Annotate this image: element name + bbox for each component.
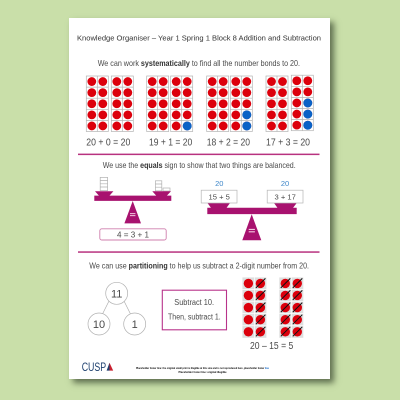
value label: 20 xyxy=(215,179,223,188)
ten frames: 18 + 2 xyxy=(207,76,252,132)
title: Knowledge Organiser – Year 1 Spring 1 Block 8 Addition and Subtraction xyxy=(77,34,321,42)
fulcrum with equals sign xyxy=(242,214,261,240)
ten frames: 17 + 3 xyxy=(266,75,313,132)
icon: cube stacks xyxy=(100,177,170,191)
value label: 20 xyxy=(281,179,289,188)
balance scale: 4 = 3 + 1 xyxy=(94,177,171,240)
equation box: 4 = 3 + 1 xyxy=(117,231,150,240)
part-whole model xyxy=(88,282,146,335)
ten frames: 19 + 1 xyxy=(147,76,193,132)
ten frame with crossed counters xyxy=(242,277,266,338)
footer text (illegible in reference; neutral placeholder): Placeholder footer line: original illegible xyxy=(178,371,227,374)
equation: 17 + 3 = 20: 17 + 3 = 20 xyxy=(266,138,310,149)
equation: 18 + 2 = 20: 18 + 2 = 20 xyxy=(207,138,250,149)
callout: subtract steps xyxy=(162,290,226,330)
ten frames: 20 + 0 xyxy=(86,76,133,132)
box: 15 + 5: 15 + 5 xyxy=(209,193,230,202)
panel: equals sign and balance xyxy=(94,160,303,240)
heading: partitioning: We can use partitioning to help us subtract a 2-digit number from 20. xyxy=(89,261,309,271)
panel: number bonds to 20 xyxy=(86,58,313,149)
balance scale: 15 + 5 and 3 + 17 xyxy=(201,179,303,240)
box: 3 + 17: 3 + 17 xyxy=(275,193,296,202)
heading: systematically: We can work systematically to find all the number bonds to 20. xyxy=(98,58,300,68)
panel: partitioning xyxy=(88,261,309,352)
part: 10: 10 xyxy=(93,319,105,331)
equation: 20 + 0 = 20: 20 + 0 = 20 xyxy=(86,138,131,149)
ten frame, all crossed xyxy=(279,277,303,338)
fulcrum with equals sign xyxy=(124,201,141,223)
scale beam and pans xyxy=(207,203,297,214)
scale beam and pans xyxy=(94,191,171,201)
equation: 20 – 15 = 5: 20 – 15 = 5 xyxy=(250,341,294,352)
logo: CUSP: CUSP xyxy=(82,360,106,374)
callout: subtract steps: Then, subtract 1. xyxy=(168,313,221,322)
heading: equals: We use the equals sign to show that two things are balanced. xyxy=(103,160,296,170)
footer text (illegible in reference; neutral placeholder): Placeholder footer line: the original small print is illegible at this size and is not reproduced here, placeholder footer line xyxy=(136,367,270,370)
part: 1: 1 xyxy=(132,319,138,331)
equation: 19 + 1 = 20: 19 + 1 = 20 xyxy=(149,138,193,149)
paper sheet xyxy=(69,18,330,379)
footer text (illegible in reference; neutral placeholder) xyxy=(136,367,270,374)
whole: 11: 11 xyxy=(111,288,122,300)
callout: subtract steps: Subtract 10. xyxy=(174,298,214,307)
